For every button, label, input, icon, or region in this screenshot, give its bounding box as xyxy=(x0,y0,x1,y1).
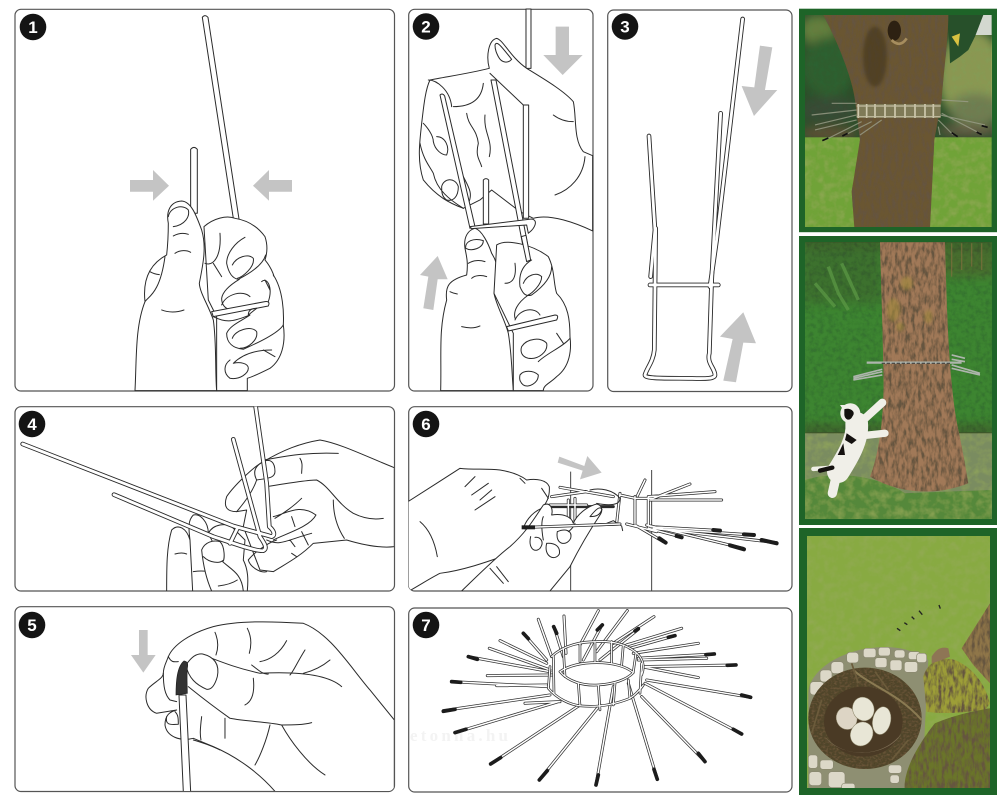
step number 6 xyxy=(413,411,439,437)
step number 4 xyxy=(19,411,45,437)
photo: protected nest with eggs xyxy=(799,528,997,795)
hand holding wire xyxy=(135,16,284,391)
nest xyxy=(808,668,922,769)
step number 5: 5 xyxy=(27,616,37,635)
spiked ring assembled xyxy=(443,611,751,785)
bent wire frame xyxy=(645,19,743,379)
cat xyxy=(813,403,885,493)
hands threading spike strip xyxy=(408,468,777,592)
arrows up and down xyxy=(420,27,583,310)
hand holding capped wire xyxy=(146,622,394,793)
step number 2: 2 xyxy=(421,18,431,36)
panel: step 6 xyxy=(408,407,792,592)
spike tips xyxy=(897,605,940,631)
trunk branches xyxy=(962,603,990,683)
arrow down xyxy=(131,630,156,673)
hands bending wires xyxy=(23,407,394,591)
panel: step 1 xyxy=(15,9,394,391)
panel: step 5 xyxy=(15,607,394,793)
stone ring xyxy=(808,647,928,792)
panel: step 4 xyxy=(15,407,394,591)
step number 1: 1 xyxy=(28,18,38,37)
step number 6: 6 xyxy=(421,415,431,434)
step number 3 xyxy=(612,13,638,40)
step number 5 xyxy=(19,612,45,638)
photo: cat at tree xyxy=(799,236,997,525)
step number 7 xyxy=(413,612,439,638)
step number 3: 3 xyxy=(620,18,630,36)
step number 1 xyxy=(20,14,46,40)
hands holding two wires xyxy=(419,9,593,391)
panel: step 7 xyxy=(409,608,792,792)
arrows pointing inward xyxy=(130,170,292,201)
spike strips on trunk xyxy=(853,355,980,380)
step number 7: 7 xyxy=(421,616,431,635)
spike band xyxy=(812,100,988,141)
photo: tree with spike ring xyxy=(798,9,1000,232)
black wire tips xyxy=(443,625,751,785)
watermark right part: etonna.hu xyxy=(410,726,508,745)
arrow right xyxy=(558,456,602,479)
panel: step 3 xyxy=(608,10,792,392)
panel: step 2 xyxy=(409,9,593,391)
watermark left part: www.m xyxy=(310,726,394,745)
arrows xyxy=(720,46,777,382)
step number 2 xyxy=(413,13,439,40)
step number 4: 4 xyxy=(27,415,37,434)
eggs xyxy=(836,696,892,746)
